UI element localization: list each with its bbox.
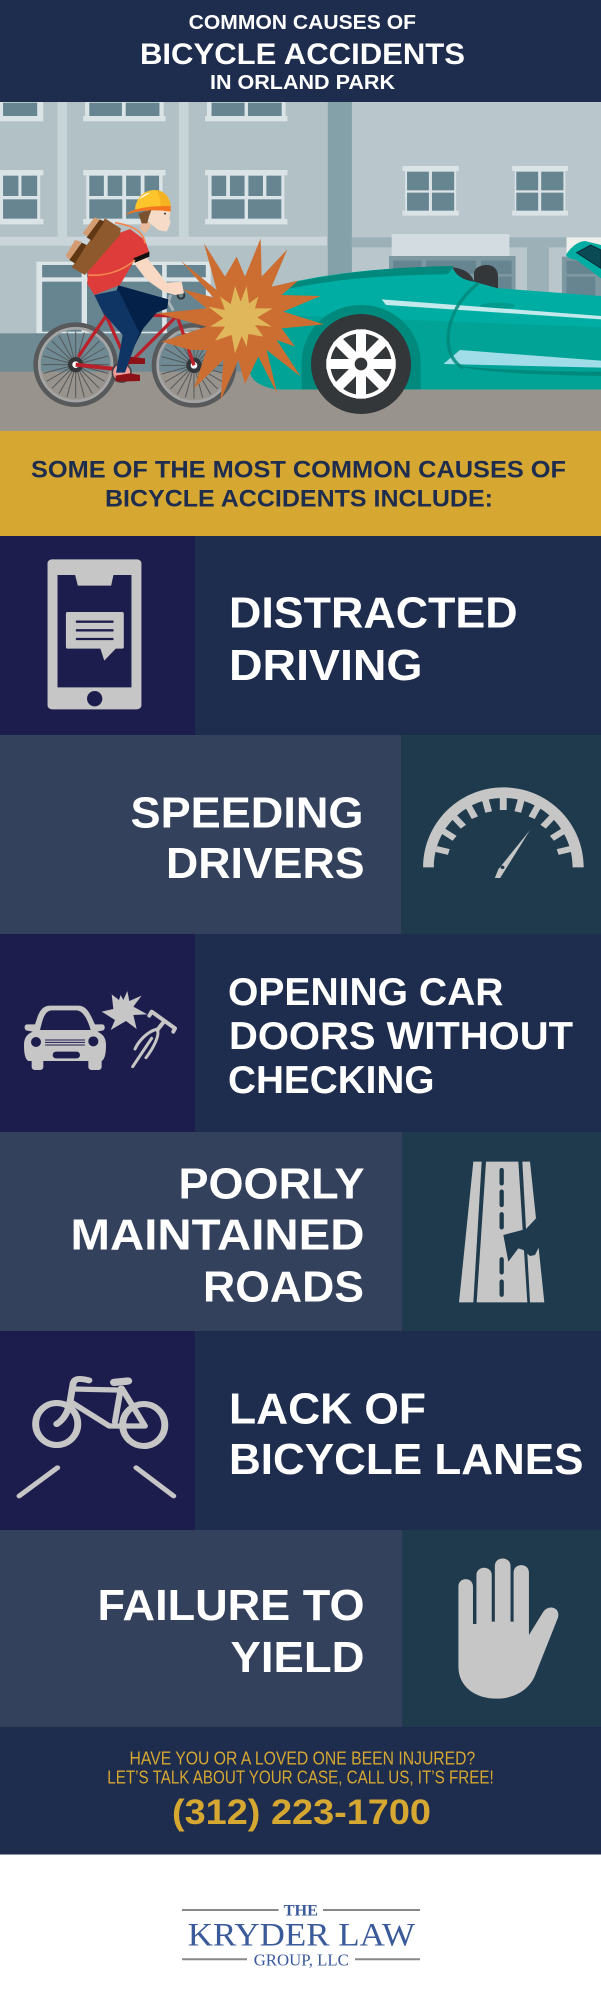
helmet xyxy=(135,190,171,209)
label: poorly maintained roads xyxy=(70,1160,364,1312)
CTA line 1: HAVE YOU OR A LOVED ONE BEEN INJURED? xyxy=(130,1749,475,1769)
icon: car, impact burst and bicycle xyxy=(24,991,175,1070)
far leg and shoe xyxy=(113,285,168,364)
logo: The Kryder Law Group, LLC: THE xyxy=(284,1903,318,1920)
header panel xyxy=(0,0,601,102)
sidewalk and road xyxy=(0,333,328,372)
label: poorly maintained roads: MAINTAINED xyxy=(70,1211,364,1259)
straps xyxy=(88,223,145,275)
street background buildings xyxy=(0,102,601,431)
panel: lack of bicycle lanes xyxy=(0,1331,601,1530)
label: distracted driving xyxy=(229,590,518,690)
panel: speeding drivers xyxy=(0,735,601,934)
car wheel xyxy=(311,314,411,414)
bicycle rear wheel xyxy=(36,325,116,405)
label: failure to yield: YIELD xyxy=(230,1634,364,1682)
label: failure to yield xyxy=(98,1582,364,1682)
label: opening car doors without checking: OPENING CAR xyxy=(228,971,504,1014)
call to action panel xyxy=(0,1727,601,1854)
label: poorly maintained roads: ROADS xyxy=(203,1264,364,1312)
title line 1: COMMON CAUSES OF xyxy=(189,12,416,34)
car xyxy=(250,241,601,414)
label: opening car doors without checking: CHECKING xyxy=(228,1059,434,1102)
label: lack of bicycle lanes: BICYCLE LANES xyxy=(229,1436,584,1484)
panel: poorly maintained roads xyxy=(0,1132,601,1331)
label: speeding drivers: SPEEDING xyxy=(130,790,364,838)
near leg xyxy=(94,290,139,373)
label: poorly maintained roads: POORLY xyxy=(178,1160,364,1208)
logo: The Kryder Law Group, LLC: KRYDER LAW xyxy=(188,1918,416,1954)
backpack xyxy=(66,217,121,275)
panel: distracted driving xyxy=(0,536,601,735)
crash explosion xyxy=(157,238,324,400)
illustration: cyclist hit by a car on a street xyxy=(0,102,601,431)
bicycle front wheel xyxy=(154,325,234,405)
logo: The Kryder Law Group, LLC: GROUP, LLC xyxy=(254,1951,349,1970)
label: opening car doors without checking: DOORS WITHOUT xyxy=(229,1015,573,1058)
ground floor door and shop front xyxy=(36,234,601,333)
label: failure to yield: FAILURE TO xyxy=(98,1582,364,1630)
bicycle frame xyxy=(78,313,194,365)
label: speeding drivers: DRIVERS xyxy=(166,840,364,888)
panel: opening car doors xyxy=(0,934,601,1132)
title line 2: BICYCLE ACCIDENTS xyxy=(140,38,465,71)
cyclist on bicycle with explosion xyxy=(36,190,324,405)
phone number: (312) 223-1700 xyxy=(172,1793,431,1832)
subheading line 2: BICYCLE ACCIDENTS INCLUDE: xyxy=(105,486,493,513)
label: lack of bicycle lanes: LACK OF xyxy=(229,1385,426,1433)
title line 3: IN ORLAND PARK xyxy=(210,72,396,94)
icon: cracked road xyxy=(459,1162,544,1302)
right building windows xyxy=(402,166,568,216)
icon: raised hand xyxy=(458,1558,558,1699)
icon: speedometer xyxy=(423,787,584,878)
label: speeding drivers xyxy=(130,790,364,888)
panel: failure to yield xyxy=(0,1530,601,1727)
logo: The Kryder Law Group, LLC xyxy=(182,1903,420,1970)
label: distracted driving: DRIVING xyxy=(229,642,422,690)
torso xyxy=(87,229,149,295)
icon: bicycle between lane lines xyxy=(19,1379,174,1496)
CTA line 2: LET’S TALK ABOUT YOUR CASE, CALL US, IT’S FREE! xyxy=(107,1768,494,1788)
near foot on pedal xyxy=(112,363,140,382)
label: distracted driving: DISTRACTED xyxy=(229,590,518,638)
label: lack of bicycle lanes xyxy=(229,1385,584,1484)
subheading line 1: SOME OF THE MOST COMMON CAUSES OF xyxy=(31,457,566,484)
top row windows xyxy=(0,102,287,121)
head xyxy=(140,222,151,233)
icon: smartphone with message xyxy=(48,559,141,709)
gold subheading band xyxy=(0,431,601,536)
label: opening car doors without checking xyxy=(228,971,573,1102)
arm xyxy=(134,257,184,295)
middle row windows xyxy=(0,170,287,224)
